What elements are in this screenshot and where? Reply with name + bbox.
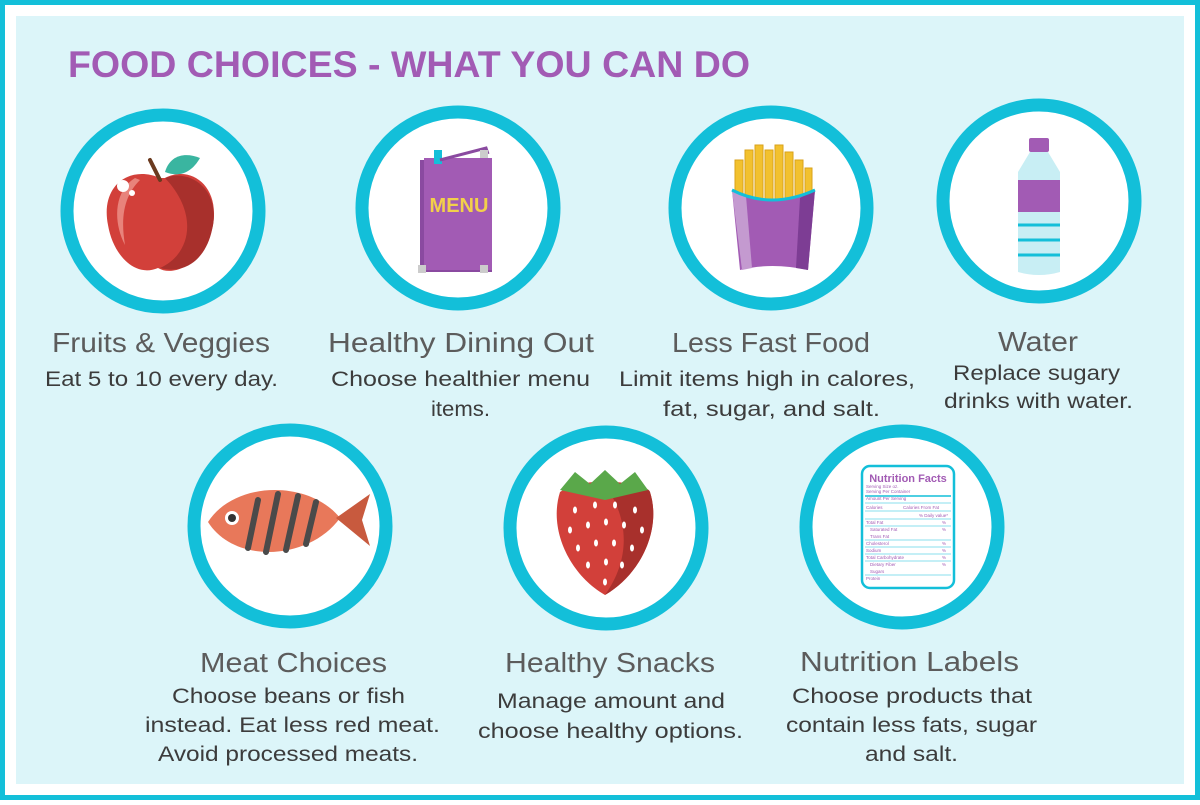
text: dining desc: Choose healthier menu: [331, 368, 590, 391]
icon: nutrition facts label: Nutrition Facts: [869, 473, 947, 485]
icon: nutrition facts label: Protein: [866, 576, 881, 581]
icon: nutrition facts label: % Daily value*: [919, 513, 948, 518]
icon: nutrition facts label: %: [942, 562, 946, 567]
panel: less fast food: [619, 112, 915, 421]
text: labels desc: and salt.: [865, 743, 958, 766]
text: labels desc: Choose products that: [792, 685, 1032, 708]
heading: Nutrition Labels: Nutrition Labels: [800, 646, 1019, 677]
icon: menu: MENU: [430, 195, 488, 217]
icon: nutrition facts label: Dietary Fiber: [870, 562, 896, 567]
text: fruits desc: Eat 5 to 10 every day.: [45, 368, 278, 391]
icon: fish: [194, 430, 386, 622]
text: water desc: Replace sugary: [953, 362, 1121, 385]
text: snacks desc: Manage amount and: [497, 690, 725, 713]
panel: healthy snacks: [478, 432, 743, 743]
icon: nutrition facts label: [806, 431, 998, 623]
icon: nutrition facts label: Amount Per Serving: [866, 496, 907, 501]
icon: nutrition facts label: %: [942, 520, 946, 525]
text: dining desc: items.: [431, 398, 490, 421]
text: meat desc: instead. Eat less red meat.: [145, 714, 440, 737]
text: water desc: drinks with water.: [944, 390, 1133, 413]
panel: fruits & veggies: [45, 115, 278, 391]
icon: nutrition facts label: Cholesterol: [866, 541, 889, 546]
icon: strawberry: [510, 432, 702, 624]
icon: nutrition facts label: %: [942, 541, 946, 546]
icon: nutrition facts label: Sodium: [866, 548, 882, 553]
text: fast food desc: Limit items high in calores,: [619, 368, 915, 391]
text: meat desc: Choose beans or fish: [172, 685, 405, 708]
panel: nutrition labels: [786, 431, 1037, 766]
icon: nutrition facts label: Total Fat: [866, 520, 884, 525]
heading: Healthy Dining Out: Healthy Dining Out: [328, 327, 594, 358]
heading: Less Fast Food: Less Fast Food: [672, 327, 870, 358]
panel: dining out: [328, 112, 594, 421]
icon: nutrition facts label: Calories From Fat: [903, 505, 940, 510]
icon: nutrition facts label: %: [942, 555, 946, 560]
text: meat desc: Avoid processed meats.: [158, 743, 418, 766]
icon: nutrition facts label: Total Carbohydrate: [866, 555, 905, 560]
heading: Water: Water: [998, 326, 1078, 357]
text: fast food desc: fat, sugar, and salt.: [663, 398, 880, 421]
icon: bottle: [943, 105, 1135, 297]
icon: menu: [362, 112, 554, 304]
icon: nutrition facts label: Sugars: [870, 569, 885, 574]
text: snacks desc: choose healthy options.: [478, 720, 743, 743]
icon: nutrition facts label: Trans Fat: [870, 534, 890, 539]
icon: nutrition facts label: %: [942, 548, 946, 553]
icon: nutrition facts label: Serving Per Container: [866, 489, 911, 494]
heading: Healthy Snacks: Healthy Snacks: [505, 647, 715, 678]
heading: Fruits & Veggies: Fruits & Veggies: [52, 327, 270, 358]
icon: fries: [675, 112, 867, 304]
icon: nutrition facts label: Calories: [866, 505, 883, 510]
icon: apple: [67, 115, 259, 307]
icon: nutrition facts label: Serving Size oz.: [866, 484, 899, 489]
text: labels desc: contain less fats, sugar: [786, 714, 1037, 737]
icon: nutrition facts label: Saturated Fat: [870, 527, 898, 532]
panel: water: [943, 105, 1135, 413]
icon: nutrition facts label: %: [942, 527, 946, 532]
heading: Meat Choices: Meat Choices: [200, 647, 387, 678]
title: FOOD CHOICES - WHAT YOU CAN DO: [68, 44, 750, 85]
panel: meat choices: [145, 430, 440, 766]
